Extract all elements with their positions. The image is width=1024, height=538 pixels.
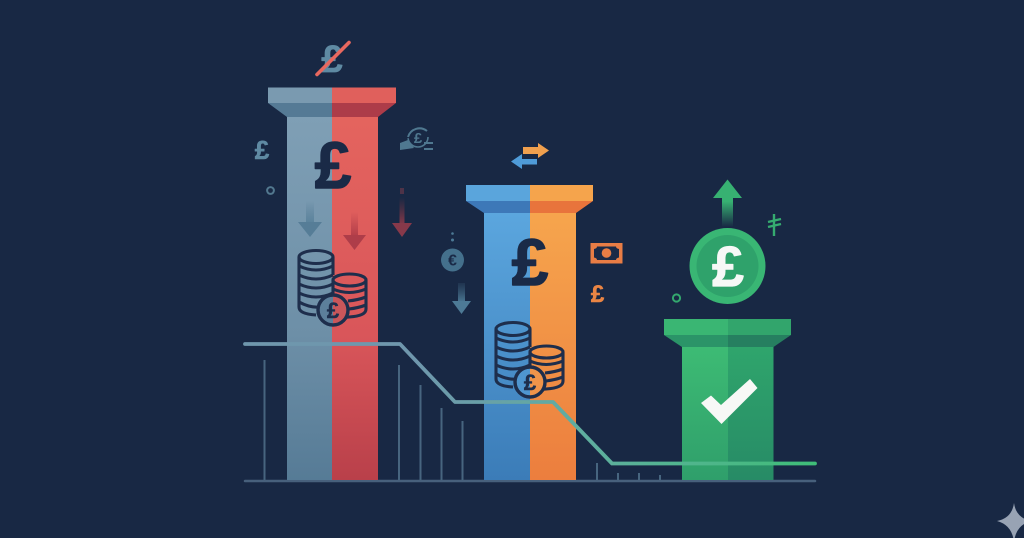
- stepped trend line: [245, 344, 815, 464]
- icon: green ring: [673, 294, 680, 302]
- coin pound on pillar 1: £: [327, 298, 340, 323]
- icon: coin stacks on pillar 1: [299, 250, 366, 325]
- arrow: dark red down outside pillar: [392, 188, 412, 237]
- pillar 1: grey and red: [268, 88, 396, 480]
- pillar 3: green: [664, 319, 791, 480]
- icon: green pound coin: £: [712, 235, 744, 299]
- icon: banknote: [590, 243, 622, 264]
- icon: corner sparkle: [997, 503, 1024, 538]
- icon: exchange arrows: [511, 143, 549, 169]
- icon: small orange pound: £: [591, 281, 605, 308]
- arrow: grey down: [298, 201, 322, 237]
- arrow: euro down: [452, 283, 471, 314]
- icon: pound coin with hand and dashes: [400, 127, 433, 150]
- icon: green pound coin: [690, 228, 766, 304]
- coin pound on pillar 2: £: [524, 370, 537, 395]
- arrow: red down: [343, 212, 366, 250]
- icon: euro coin: [441, 248, 464, 272]
- icon: pound coin with hand and dashes: £: [414, 130, 423, 147]
- large pound on pillar 1: £: [315, 128, 352, 202]
- icon: coin stacks on pillar 2: [496, 322, 563, 397]
- icon: euro coin: €: [448, 252, 457, 270]
- icon: small ring left: [267, 187, 274, 194]
- large pound on pillar 2: £: [512, 225, 549, 299]
- icon: white check mark: [701, 379, 758, 424]
- axis baseline: [245, 480, 815, 482]
- icon: small pound left: £: [255, 135, 270, 165]
- background chart ticks: [264, 360, 660, 480]
- arrow: green up: [713, 180, 742, 227]
- icon: crossed-out pound: £: [321, 39, 343, 81]
- icon: crossed-out pound: [317, 39, 349, 81]
- icon: green tenge-like symbol: [768, 214, 781, 236]
- icon: dots above euro: [451, 232, 454, 242]
- pillar 2: blue and orange: [466, 185, 593, 480]
